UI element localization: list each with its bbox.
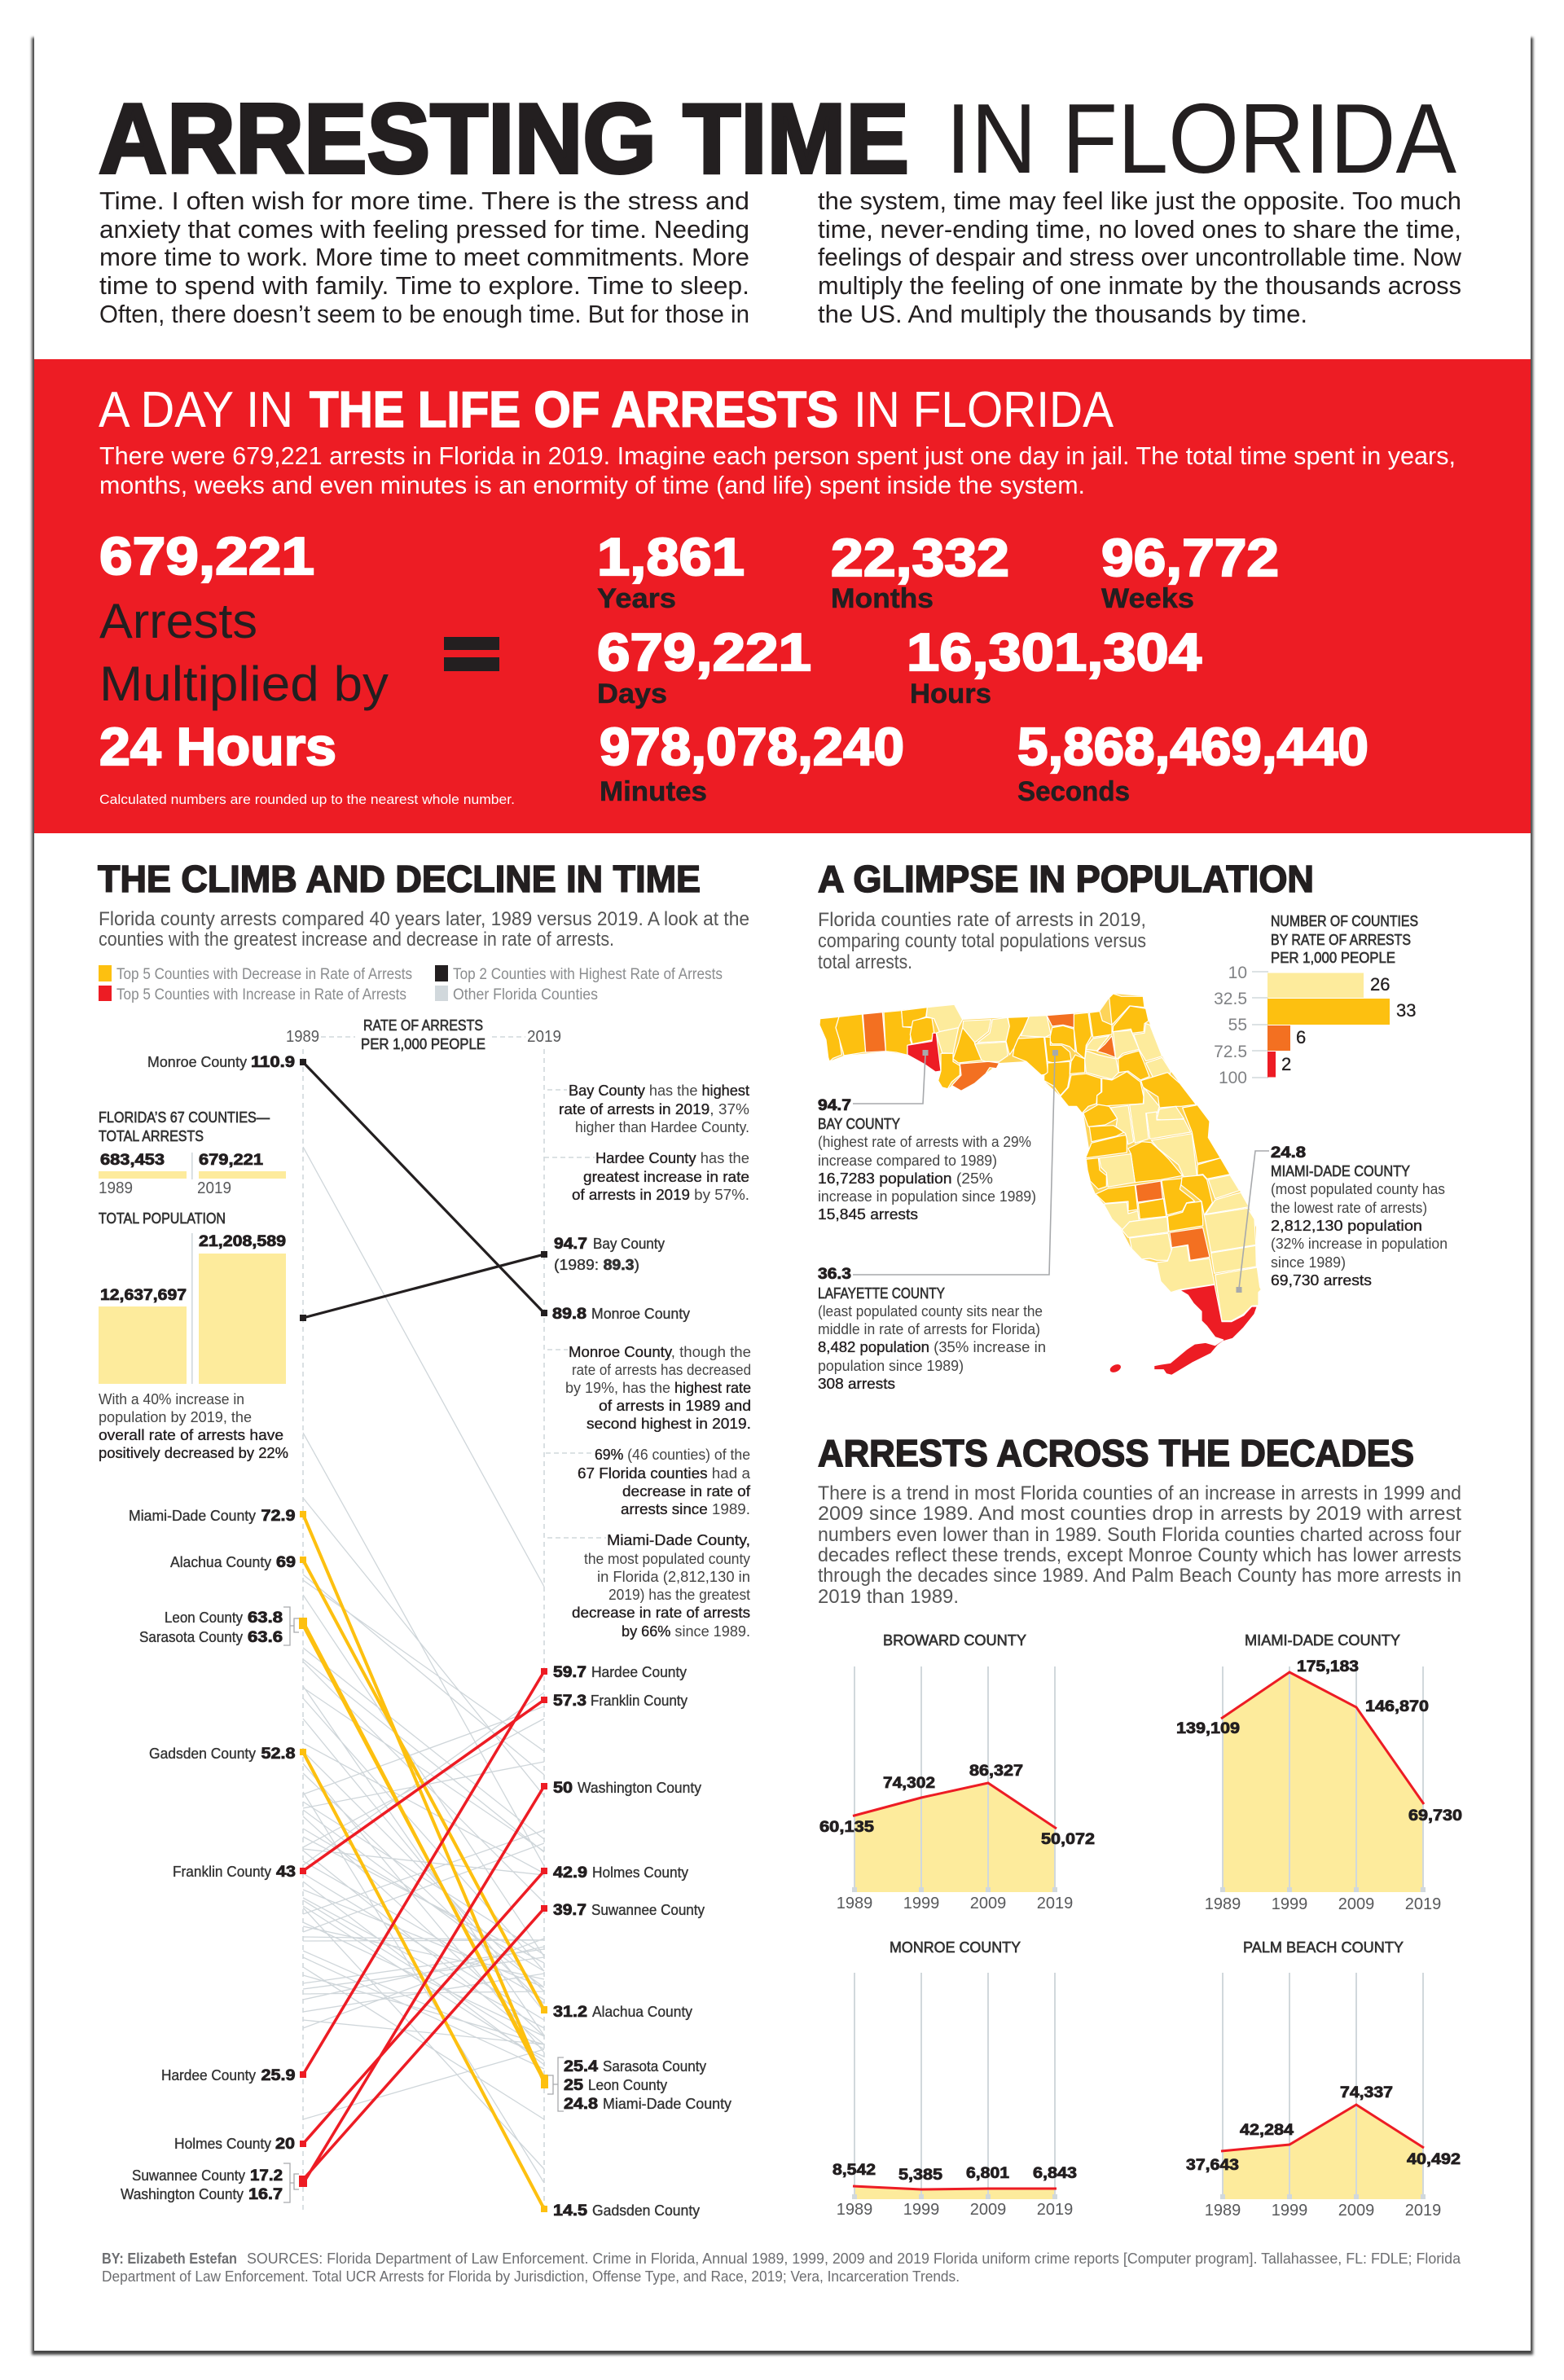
- title: IN FLORIDA: [946, 83, 1457, 194]
- totals note: [99, 1391, 288, 1461]
- callout: miami-dade county: 24.8: [1271, 1144, 1306, 1161]
- county labels 1989: 20: [275, 2136, 295, 2153]
- decades text: [818, 1482, 1461, 1608]
- county labels 2019: 24.8: [564, 2096, 598, 2113]
- chart: monroe county: 1999: [903, 2201, 939, 2219]
- chart: monroe county: 2019: [1037, 2201, 1073, 2219]
- chart: palm beach county: 2019: [1405, 2202, 1441, 2220]
- stat: years: [597, 527, 745, 614]
- intro text: anxiety that comes with feeling pressed for time. Needing: [99, 215, 749, 244]
- stat: weeks: 96,772: [1101, 528, 1279, 587]
- intro text: time, never-ending time, no loved ones to share the time,: [818, 215, 1461, 244]
- county labels 2019: Holmes County: [592, 1864, 688, 1881]
- county labels 1989: Hardee County: [161, 2067, 256, 2084]
- callout: lafayette county: 308 arrests: [818, 1376, 895, 1392]
- chart: monroe county: 6,843: [1033, 2165, 1077, 2182]
- chart: broward county: 74,302: [883, 1775, 935, 1792]
- bar chart: number of counties by rate: 32.5: [1214, 990, 1247, 1008]
- county labels 2019: 25: [564, 2077, 583, 2094]
- county labels 1989: Alachua County: [170, 1554, 271, 1570]
- county labels 1989: 52.8: [261, 1745, 295, 1763]
- county labels 2019: 59.7: [553, 1664, 586, 1681]
- county labels 1989: 110.9: [251, 1054, 295, 1071]
- glimpse text: Florida counties rate of arrests in 2019,: [818, 909, 1146, 931]
- intro text: [99, 187, 1462, 328]
- county labels 2019: Suwannee County: [591, 1902, 705, 1918]
- title: [99, 83, 1457, 194]
- stat: hours: Hours: [910, 678, 991, 709]
- glimpse text: total arrests.: [818, 951, 912, 973]
- chart notes: by 19%, has the highest rate: [565, 1380, 751, 1396]
- chart: palm beach county: 37,643: [1186, 2157, 1239, 2174]
- chart: monroe county: MONROE COUNTY: [890, 1939, 1021, 1956]
- stat: days: 679,221: [597, 622, 811, 682]
- heading: arrests across the decades: ARRESTS ACROSS THE DECADES: [818, 1432, 1414, 1474]
- chart: monroe county: [833, 1939, 1077, 2219]
- total arrests bars: 1989: [99, 1179, 133, 1197]
- statewide totals panel: [99, 1109, 288, 1461]
- stat: months: [831, 528, 1009, 614]
- county labels 2019: Monroe County: [591, 1306, 690, 1322]
- stat: months: 22,332: [831, 528, 1009, 587]
- equation left side: 24 Hours: [99, 717, 336, 776]
- glimpse text: comparing county total populations versus: [818, 930, 1146, 952]
- chart notes: rate of arrests has decreased: [572, 1362, 751, 1378]
- total arrests bars: TOTAL ARRESTS: [99, 1128, 204, 1144]
- bar chart: number of counties by rate: NUMBER OF COUNTIES: [1271, 913, 1418, 929]
- total population bars: TOTAL POPULATION: [99, 1210, 226, 1227]
- panel intro text: [99, 441, 1456, 499]
- county labels 2019: 89.8: [552, 1306, 586, 1323]
- lines: top 5 increase: [299, 1668, 547, 2187]
- callout: bay county: (highest rate of arrests with a 29%: [818, 1134, 1031, 1150]
- callout: lafayette county: (least populated county sits near the: [818, 1303, 1043, 1320]
- heading: a day in the life: [99, 382, 1114, 438]
- callout: miami-dade county: (most populated county has: [1271, 1181, 1445, 1197]
- slope chart header: RATE OF ARRESTS: [363, 1017, 483, 1034]
- total arrests bars: FLORIDA’S 67 COUNTIES—: [99, 1109, 270, 1126]
- footer credits: Department of Law Enforcement. Total UCR Arrests for Florida by Jurisdiction, Offense Type, and Race, 2019; Vera, Incarceration Trends.: [102, 2268, 960, 2285]
- county labels 2019: [547, 1236, 731, 2220]
- chart: broward county: 60,135: [819, 1819, 874, 1836]
- other florida counties lines: [303, 1147, 544, 2183]
- county labels 1989: 72.9: [261, 1508, 295, 1525]
- stat: seconds: 5,868,469,440: [1017, 717, 1368, 776]
- chart: miami-dade county: 1989: [1205, 1895, 1241, 1913]
- county labels 1989: Sarasota County: [139, 1629, 243, 1645]
- callout: bay county: increase compared to 1989): [818, 1153, 997, 1169]
- stat: hours: 16,301,304: [907, 622, 1202, 682]
- total population bars: [99, 1210, 286, 1384]
- county labels 1989: 63.8: [248, 1609, 283, 1627]
- intro text: Time. I often wish for more time. There is the stress and: [99, 187, 749, 215]
- bar chart: number of counties by rate: BY RATE OF ARRESTS: [1271, 932, 1411, 948]
- totals note: population by 2019, the: [99, 1409, 252, 1425]
- chart: miami-dade county: 2009: [1338, 1895, 1374, 1913]
- county labels 2019: Franklin County: [591, 1693, 688, 1709]
- chart: palm beach county: 1999: [1272, 2202, 1307, 2220]
- callout: lafayette county: population since 1989): [818, 1358, 964, 1374]
- county labels 1989: 17.2: [250, 2167, 283, 2185]
- footer credits: SOURCES: Florida Department of Law Enforcement. Crime in Florida, Annual 1989, 1999, 2009 and 2019 Florida uniform crime reports [Computer program]. Tallahassee, FL: FDLE; Florida: [247, 2250, 1461, 2267]
- callout: bay county: BAY COUNTY: [818, 1116, 900, 1132]
- chart notes: greatest increase in rate: [583, 1169, 749, 1185]
- callout: miami-dade county: since 1989): [1271, 1254, 1346, 1271]
- county labels 1989: Holmes County: [174, 2136, 271, 2152]
- callout: bay county: 15,845 arrests: [818, 1206, 918, 1223]
- chart: palm beach county: 40,492: [1407, 2151, 1461, 2168]
- chart: palm beach county: PALM BEACH COUNTY: [1243, 1939, 1404, 1956]
- county labels 2019: 31.2: [553, 2004, 587, 2021]
- chart: broward county: 2019: [1037, 1895, 1073, 1912]
- callout: bay county: 16,7283 population (25%: [818, 1170, 993, 1187]
- county labels 2019: Alachua County: [592, 2004, 692, 2020]
- county labels 1989: Monroe County: [147, 1054, 247, 1070]
- callout: miami-dade county: 69,730 arrests: [1271, 1272, 1372, 1289]
- equation left side: 679,221: [99, 526, 314, 586]
- chart notes: higher than Hardee County.: [575, 1119, 749, 1135]
- map: florida counties by rate of arrests: [819, 994, 1261, 1375]
- county labels 1989: Gadsden County: [149, 1745, 256, 1762]
- bar chart: number of counties by rate: 10: [1228, 964, 1247, 982]
- equation left side: Calculated numbers are rounded up to the nearest whole number.: [99, 792, 515, 807]
- chart: miami-dade county: 139,109: [1176, 1720, 1240, 1737]
- intro text: the system, time may feel like just the opposite. Too much: [818, 187, 1461, 215]
- county labels 1989: 16.7: [248, 2186, 283, 2203]
- panel intro text: months, weeks and even minutes is an enormity of time (and life) spent inside the system.: [99, 471, 1085, 499]
- chart notes: Monroe County, though the: [569, 1344, 751, 1360]
- totals note: positively decreased by 22%: [99, 1445, 288, 1461]
- totals note: overall rate of arrests have: [99, 1427, 283, 1443]
- decades text: 2009 since 1989. And most counties drop in arrests by 2019 with arrest: [818, 1503, 1461, 1525]
- climb subtitle: Florida county arrests compared 40 years later, 1989 versus 2019. A look at the: [99, 908, 749, 930]
- lines: top 5 decrease: [299, 1511, 548, 2212]
- chart notes: by 66% since 1989.: [622, 1623, 750, 1640]
- intro text: multiply the feeling of one inmate by the thousands across: [818, 271, 1461, 300]
- bar chart: number of counties by rate: 2: [1281, 1054, 1291, 1074]
- glimpse text: [818, 909, 1146, 973]
- chart: miami-dade county: MIAMI-DADE COUNTY: [1245, 1632, 1400, 1649]
- callout: bay county: 94.7: [818, 1097, 851, 1114]
- county labels 2019: 50: [553, 1780, 573, 1797]
- equation left side: Arrests: [99, 594, 257, 648]
- intro text: time to spend with family. Time to explore. Time to sleep.: [99, 271, 749, 300]
- bar chart: number of counties by rate: PER 1,000 PEOPLE: [1271, 950, 1395, 966]
- heading: a day in the life: IN FLORIDA: [854, 382, 1114, 438]
- chart: palm beach county: [1186, 1939, 1461, 2220]
- chart: broward county: [819, 1632, 1095, 1912]
- panel: a day in the life of arrests: [34, 359, 1531, 833]
- total arrests bars: 2019: [197, 1179, 231, 1197]
- callout: lafayette county: LAFAYETTE COUNTY: [818, 1285, 945, 1302]
- chart: broward county: BROWARD COUNTY: [883, 1632, 1026, 1649]
- chart: palm beach county: 74,337: [1340, 2084, 1393, 2101]
- bar chart: number of counties by rate: [1214, 913, 1418, 1087]
- chart: broward county: 2009: [970, 1895, 1006, 1912]
- county labels 2019: Miami-Dade County: [603, 2096, 731, 2112]
- stat: years: Years: [597, 583, 676, 614]
- chart notes: arrests since 1989.: [621, 1501, 750, 1517]
- county labels 2019: Sarasota County: [603, 2058, 706, 2075]
- county labels 2019: (1989: 89.3): [554, 1257, 639, 1273]
- heading: a day in the life: THE LIFE OF ARRESTS: [310, 382, 838, 438]
- decades text: decades reflect these trends, except Monroe County which has lower arrests: [818, 1544, 1461, 1566]
- title: ARRESTING TIME: [99, 83, 909, 194]
- lines: top 2 highest: [300, 1059, 547, 1321]
- county labels 1989: Miami-Dade County: [129, 1508, 256, 1524]
- stat: years: 1,861: [597, 527, 745, 586]
- decades text: There is a trend in most Florida counties of an increase in arrests in 1999 and: [818, 1482, 1461, 1504]
- stat: weeks: Weeks: [1101, 583, 1194, 614]
- chart: monroe county: 6,801: [966, 2165, 1009, 2182]
- chart: monroe county: 8,542: [833, 2162, 876, 2179]
- panel intro text: There were 679,221 arrests in Florida in 2019. Imagine each person spent just one day in jail. The total time spent in years,: [99, 441, 1456, 470]
- county labels 2019: 57.3: [553, 1693, 586, 1710]
- chart notes: decrease in rate of arrests: [572, 1605, 750, 1621]
- chart notes: the most populated county: [584, 1551, 750, 1567]
- chart notes: decrease in rate of: [622, 1483, 751, 1500]
- equation left side: [99, 526, 515, 807]
- bar chart: number of counties by rate: 55: [1228, 1016, 1247, 1034]
- county labels 1989: Washington County: [121, 2186, 244, 2202]
- county labels 2019: Bay County: [593, 1236, 665, 1252]
- stat: minutes: Minutes: [600, 776, 707, 807]
- chart notes: Miami-Dade County,: [607, 1532, 750, 1548]
- total arrests bars: 683,453: [100, 1152, 165, 1169]
- slope chart header: 1989: [286, 1028, 319, 1046]
- slope chart header: 2019: [527, 1028, 561, 1046]
- intro text: Often, there doesn’t seem to be enough time. But for those in: [99, 300, 749, 328]
- chart notes: [544, 1082, 751, 1640]
- chart: miami-dade county: 175,183: [1297, 1658, 1359, 1675]
- total population bars: 21,208,589: [199, 1233, 286, 1250]
- heading: a glimpse in population: A GLIMPSE IN POPULATION: [818, 858, 1314, 900]
- chart: miami-dade county: 1999: [1272, 1895, 1307, 1913]
- chart notes: Hardee County has the: [595, 1150, 749, 1166]
- chart: miami-dade county: [1176, 1632, 1462, 1913]
- county labels 1989: Leon County: [165, 1609, 243, 1626]
- chart: miami-dade county: 146,870: [1365, 1698, 1429, 1715]
- chart notes: in Florida (2,812,130 in: [597, 1569, 750, 1585]
- footer credits: BY: Elizabeth Estefan: [102, 2250, 237, 2267]
- total arrests bars: 679,221: [199, 1152, 263, 1169]
- bar chart: number of counties by rate: 100: [1219, 1069, 1247, 1087]
- stat: minutes: [600, 717, 904, 807]
- callout: lafayette county: [818, 1050, 1058, 1392]
- callout: bay county: [818, 1050, 1036, 1223]
- chart: palm beach county: 1989: [1205, 2202, 1241, 2220]
- bar chart: number of counties by rate: 26: [1370, 974, 1390, 995]
- chart: monroe county: 2009: [970, 2201, 1006, 2219]
- county labels 1989: 69: [276, 1554, 296, 1571]
- total population bars: 12,637,697: [100, 1287, 187, 1304]
- county labels 2019: 25.4: [564, 2058, 598, 2075]
- equation left side: Multiplied by: [99, 656, 389, 711]
- total arrests bars: [99, 1109, 286, 1197]
- county labels 2019: 14.5: [553, 2202, 587, 2220]
- county labels 2019: 42.9: [553, 1864, 587, 1882]
- county labels 2019: Leon County: [588, 2077, 667, 2093]
- county labels 2019: 39.7: [553, 1902, 586, 1919]
- county labels 1989: 43: [276, 1864, 296, 1881]
- decades text: 2019 than 1989.: [818, 1586, 959, 1608]
- callout: lafayette county: middle in rate of arrests for Florida): [818, 1321, 1040, 1337]
- slope chart header: PER 1,000 PEOPLE: [361, 1036, 485, 1052]
- chart: monroe county: 5,385: [898, 2167, 942, 2184]
- decades text: numbers even lower than in 1989. South Florida counties charted across four: [818, 1524, 1461, 1546]
- chart: broward county: 1999: [903, 1895, 939, 1912]
- legend: Top 2 Counties with Highest Rate of Arrests: [453, 966, 723, 983]
- climb subtitle: [99, 908, 749, 951]
- bar chart: number of counties by rate: 6: [1296, 1027, 1306, 1047]
- county labels 1989: Franklin County: [173, 1864, 271, 1880]
- chart notes: Bay County has the highest: [569, 1082, 749, 1099]
- county labels 1989: 63.6: [248, 1629, 283, 1646]
- stat: hours: [907, 622, 1202, 709]
- chart notes: of arrests in 1989 and: [599, 1398, 751, 1414]
- legend: Top 5 Counties with Decrease in Rate of Arrests: [116, 966, 412, 983]
- bar chart: number of counties by rate: 72.5: [1214, 1043, 1247, 1061]
- bar chart: number of counties by rate: 33: [1396, 1000, 1416, 1021]
- stat: seconds: [1017, 717, 1368, 807]
- chart: miami-dade county: 69,730: [1408, 1807, 1462, 1825]
- legend: Other Florida Counties: [453, 986, 598, 1003]
- totals note: With a 40% increase in: [99, 1391, 244, 1407]
- decades text: through the decades since 1989. And Palm Beach County has more arrests in: [818, 1565, 1461, 1587]
- intro text: the US. And multiply the thousands by time.: [818, 300, 1307, 328]
- chart: miami-dade county: 2019: [1405, 1895, 1441, 1913]
- callout: lafayette county: 8,482 population (35% increase in: [818, 1339, 1046, 1355]
- callout: bay county: increase in population since 1989): [818, 1188, 1036, 1205]
- chart notes: of arrests in 2019 by 57%.: [572, 1187, 749, 1203]
- stat: minutes: 978,078,240: [600, 717, 904, 776]
- icon: equals sign: [444, 637, 499, 671]
- climb subtitle: counties with the greatest increase and decrease in rate of arrests.: [99, 929, 614, 951]
- callout: lafayette county: 36.3: [818, 1266, 851, 1283]
- callout: miami-dade county: 2,812,130 population: [1271, 1218, 1422, 1234]
- chart: broward county: 1989: [837, 1895, 872, 1912]
- legend: [99, 965, 723, 1003]
- chart: broward county: 86,327: [969, 1763, 1023, 1780]
- chart: palm beach county: 42,284: [1240, 2122, 1294, 2139]
- chart notes: rate of arrests in 2019 , 37%: [559, 1101, 749, 1118]
- chart: broward county: 50,072: [1041, 1831, 1095, 1848]
- intro text: more time to work. More time to meet commitments. More: [99, 243, 749, 271]
- county labels 2019: Washington County: [578, 1780, 701, 1796]
- callout: miami-dade county: MIAMI-DADE COUNTY: [1271, 1163, 1410, 1179]
- chart: monroe county: 1989: [837, 2201, 872, 2219]
- stat: days: [597, 622, 811, 709]
- heading: the climb and decline in time: THE CLIMB AND DECLINE IN TIME: [98, 858, 701, 900]
- county labels 2019: Hardee County: [591, 1664, 687, 1680]
- chart notes: 69% (46 counties) of the: [595, 1447, 750, 1463]
- stat: days: Days: [597, 678, 667, 709]
- legend: Top 5 Counties with Increase in Rate of Arrests: [116, 986, 406, 1003]
- county labels 1989: [121, 1054, 299, 2203]
- heading: a day in the life: A DAY IN: [99, 382, 293, 438]
- stat: weeks: [1101, 528, 1279, 614]
- county labels 2019: 94.7: [554, 1236, 587, 1253]
- slope chart: rate of arrests 1989 vs 2019: [121, 1017, 751, 2220]
- chart: palm beach county: 2009: [1338, 2202, 1374, 2220]
- callout: miami-dade county: [1237, 1144, 1448, 1293]
- county labels 1989: 25.9: [261, 2067, 295, 2084]
- chart notes: second highest in 2019.: [586, 1416, 751, 1432]
- county labels 1989: Suwannee County: [132, 2167, 245, 2184]
- callout: miami-dade county: the lowest rate of arrests): [1271, 1200, 1427, 1216]
- intro text: feelings of despair and stress over uncontrollable time. Now: [818, 243, 1462, 271]
- slope chart header: [286, 1017, 561, 1052]
- county labels 2019: Gadsden County: [592, 2202, 700, 2219]
- footer credits: [102, 2250, 1461, 2285]
- stat: months: Months: [831, 583, 934, 614]
- stat: seconds: Seconds: [1017, 776, 1130, 807]
- chart notes: 67 Florida counties had a: [578, 1465, 751, 1482]
- chart notes: 2019) has the greatest: [608, 1587, 750, 1603]
- callout: miami-dade county: (32% increase in population: [1271, 1236, 1448, 1252]
